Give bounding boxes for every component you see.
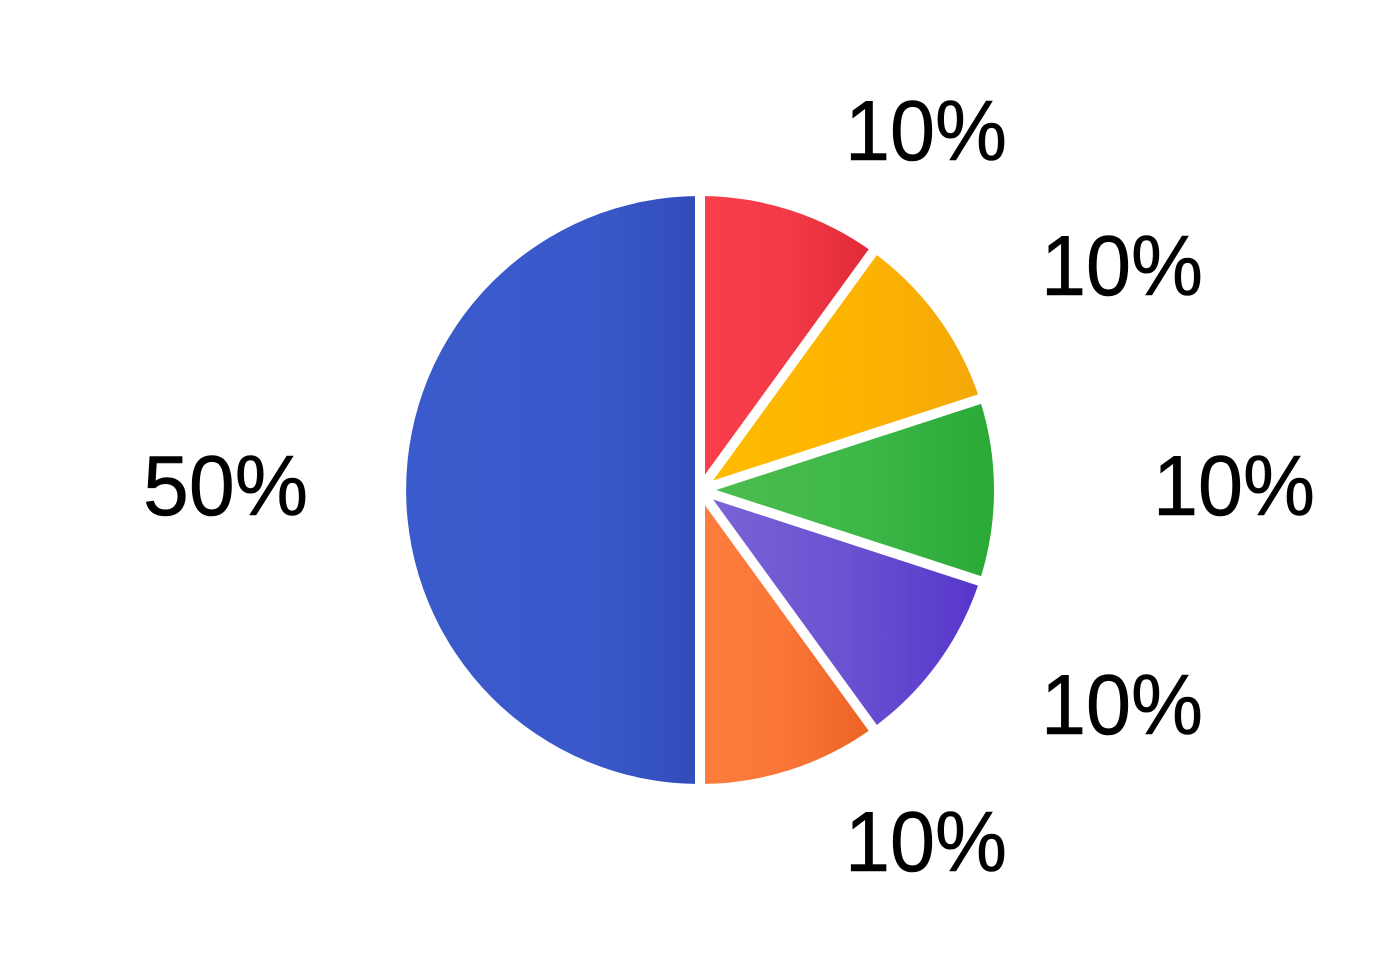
label: 50% blue: 50% [143,439,308,534]
slice: green 10% [700,399,994,581]
slice: orange 10% [700,490,873,784]
slice separators [700,190,985,790]
label: 10% red: 10% [845,84,1007,179]
label: 10% green: 10% [1153,439,1315,534]
label: 10% purple: 10% [1041,658,1203,753]
slice: red 10% [700,196,873,490]
label: 10% yellow: 10% [1041,219,1203,314]
pie chart [406,190,994,790]
label: 10% orange: 10% [845,795,1007,890]
slice: purple 10% [700,490,980,728]
slice: yellow 10% [700,252,980,490]
slice: blue 50% [406,196,700,784]
